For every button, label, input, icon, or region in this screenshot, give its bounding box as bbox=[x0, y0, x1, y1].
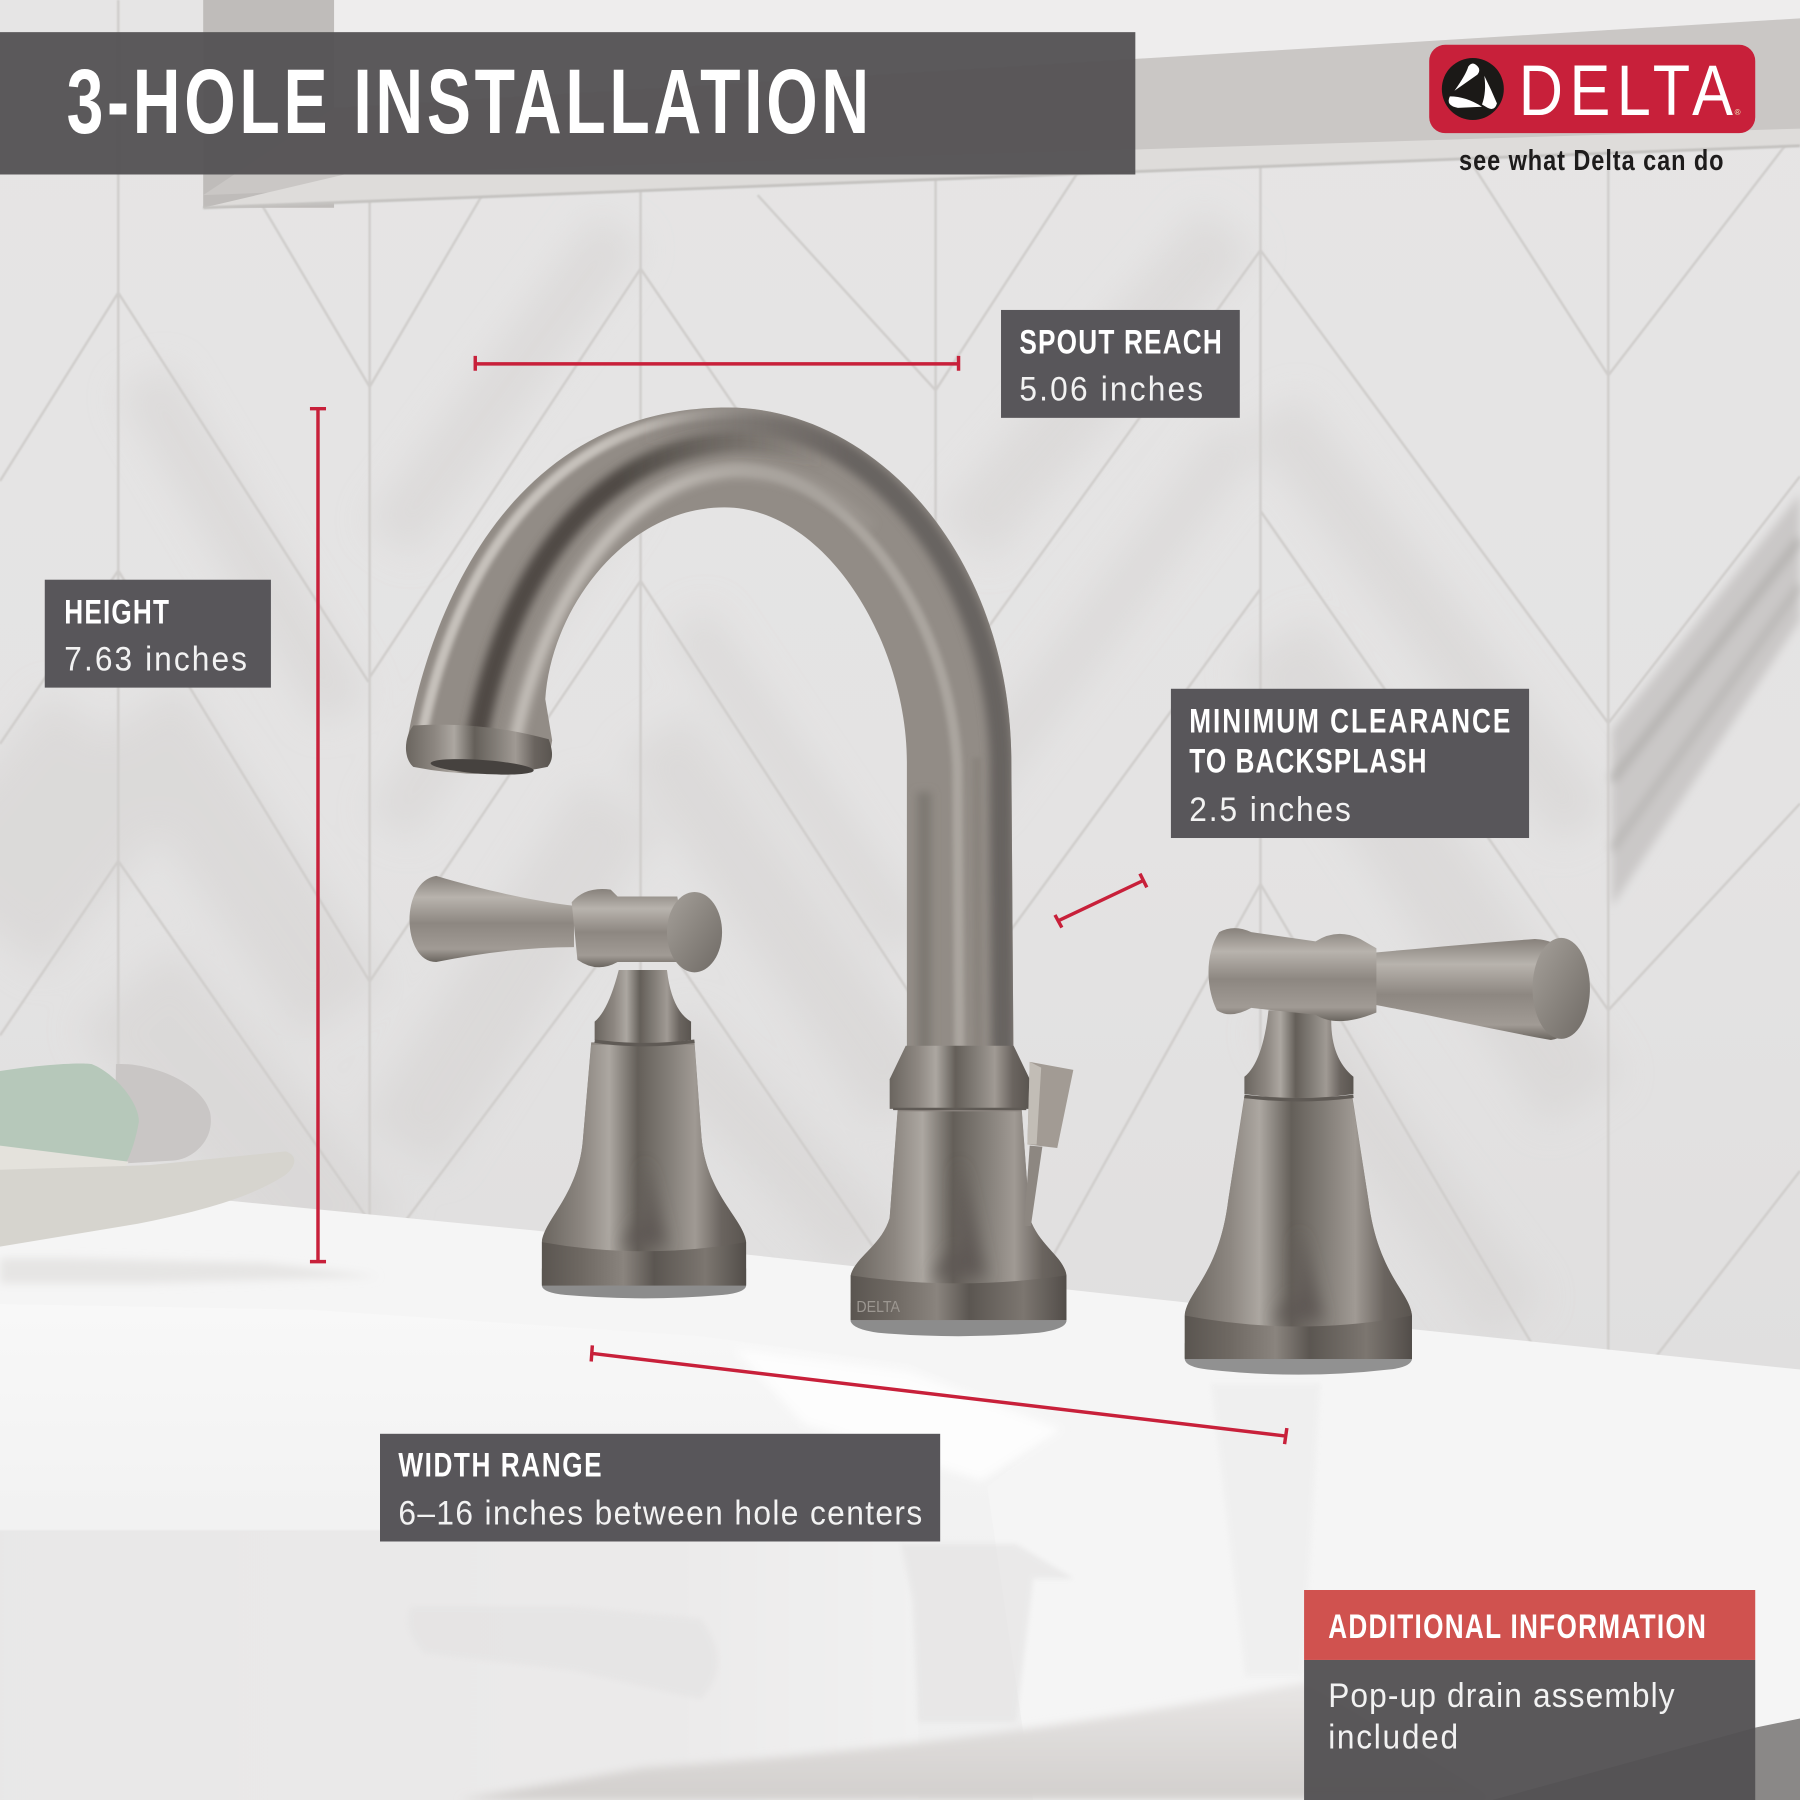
Delta logo: DELTA bbox=[1519, 52, 1734, 131]
left handle bbox=[410, 876, 746, 1298]
spout bbox=[406, 408, 1014, 1085]
soap dish with tube bbox=[0, 1063, 294, 1247]
callout: spout reach: 5.06 inches bbox=[1019, 370, 1203, 409]
dimension line: height bbox=[310, 409, 326, 1262]
callout: minimum clearance: 2.5 inches bbox=[1189, 791, 1351, 829]
reflection of faucet in the basin bbox=[408, 1383, 1320, 1722]
Delta logo bbox=[1429, 45, 1755, 133]
drain lift rod bbox=[1024, 1062, 1073, 1226]
dimension line: width range bbox=[591, 1345, 1287, 1444]
callout: minimum clearance: MINIMUM CLEARANCE bbox=[1189, 702, 1510, 740]
panel: additional information: included bbox=[1328, 1718, 1458, 1757]
faucet bbox=[406, 408, 1590, 1375]
tagline: see what Delta can do bbox=[1459, 144, 1724, 176]
callout: spout reach bbox=[1001, 310, 1240, 418]
dimension line: spout reach bbox=[475, 356, 959, 371]
callout: height bbox=[45, 580, 271, 688]
callout: width range bbox=[380, 1434, 940, 1542]
callout: height: HEIGHT bbox=[64, 593, 169, 631]
aerator bbox=[406, 725, 552, 774]
title banner: 3-HOLE INSTALLATION bbox=[67, 51, 869, 153]
callout: minimum clearance: TO BACKSPLASH bbox=[1189, 742, 1427, 780]
mirror frame bbox=[203, 0, 1800, 208]
icon: delta triangle bbox=[1442, 58, 1504, 120]
callout: width range: 6–16 inches between hole centers bbox=[398, 1494, 922, 1533]
panel: additional information bbox=[1304, 1590, 1755, 1800]
callout: height: 7.63 inches bbox=[64, 640, 247, 679]
callout: minimum clearance bbox=[1171, 689, 1529, 838]
Delta logo: ® bbox=[1735, 108, 1741, 117]
dimension line: backsplash clearance bbox=[1055, 874, 1147, 928]
panel: additional information: Pop-up drain assembly bbox=[1328, 1677, 1675, 1715]
right handle bbox=[1185, 928, 1590, 1375]
centre collar and body bbox=[851, 1046, 1069, 1336]
vanity countertop and basin bbox=[0, 1182, 1800, 1800]
panel: additional information: ADDITIONAL INFORMATION bbox=[1328, 1608, 1706, 1646]
callout: width range: WIDTH RANGE bbox=[398, 1446, 602, 1484]
title banner bbox=[0, 32, 1135, 174]
callout: spout reach: SPOUT REACH bbox=[1019, 323, 1222, 361]
centre collar and body: DELTA bbox=[856, 1298, 900, 1316]
background: marble chevron wall bbox=[0, 0, 1800, 1378]
